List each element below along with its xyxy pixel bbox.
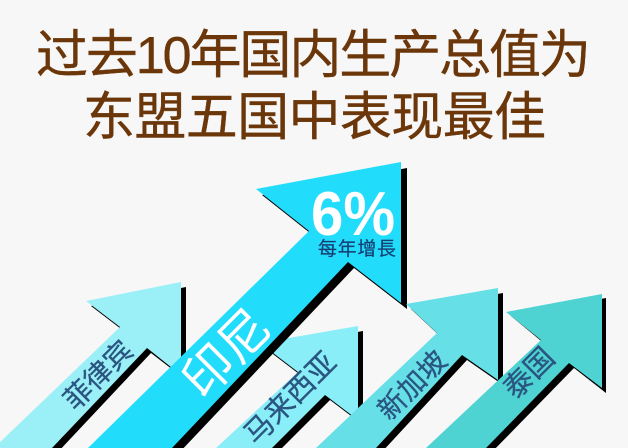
title: 东盟五国中表现最佳 bbox=[83, 89, 546, 147]
arrow: Indonesia bbox=[88, 162, 407, 448]
title: 过去10年国内生产总值为 bbox=[36, 27, 591, 85]
label: Singapore: 新加坡 bbox=[372, 345, 453, 426]
label: Philippines: 菲律宾 bbox=[58, 335, 139, 416]
arrow: Malaysia bbox=[216, 326, 363, 448]
stat: 6%: 6% bbox=[311, 180, 395, 249]
arrow: Thailand bbox=[426, 294, 606, 448]
label: Malaysia: 马来西亚 bbox=[238, 346, 343, 448]
title bbox=[36, 27, 591, 147]
label: Thailand: 泰国 bbox=[497, 341, 562, 406]
arrow: Philippines bbox=[0, 282, 186, 448]
arrow: Singapore bbox=[316, 288, 503, 448]
caption: annual growth: 每年增長 bbox=[318, 238, 396, 260]
label: Indonesia: 印尼 bbox=[172, 299, 282, 409]
